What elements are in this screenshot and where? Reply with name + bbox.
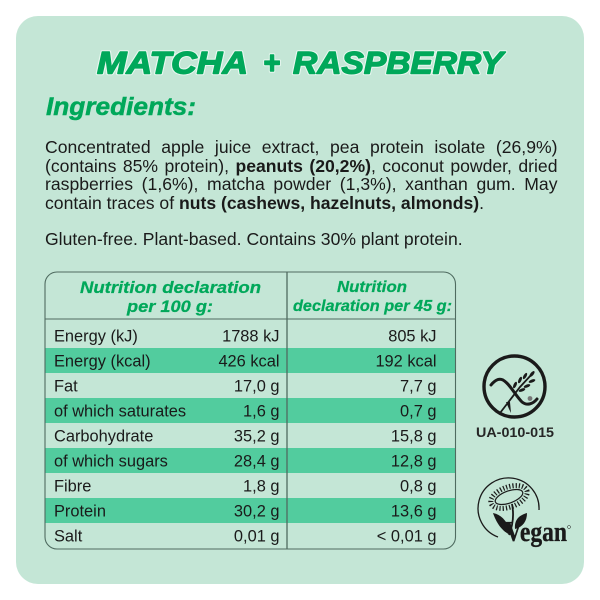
- gluten free code: UA-010-015: [476, 424, 554, 440]
- values per 45 g: 12,8 g: [391, 452, 436, 470]
- values per 100 g: [218, 328, 280, 546]
- values per 100 g: 0,01 g: [234, 528, 280, 546]
- row labels: [54, 328, 186, 546]
- ingredients text: Gluten-free. Plant-based. Contains 30% plant protein.: [45, 229, 463, 249]
- title: RASPBERRY: [293, 44, 506, 80]
- title: +: [263, 44, 280, 80]
- row labels: Energy (kJ): [54, 328, 138, 346]
- values per 45 g: 0,7 g: [400, 402, 436, 420]
- title: MATCHA: [97, 44, 248, 80]
- icon: vegan: [478, 478, 570, 548]
- row labels: Energy (kcal): [54, 352, 151, 370]
- heading: ingredients: Ingredients:: [46, 93, 196, 121]
- vegan wordmark: Vegan: [505, 516, 567, 548]
- icon: gluten free: [476, 356, 554, 440]
- ingredients text: (contains 85% protein), peanuts (20,2%), coconut powder, dried: [45, 156, 558, 176]
- table header: per 45 g: declaration per 45 g:: [293, 298, 452, 315]
- ingredients text: [45, 137, 558, 249]
- values per 45 g: 13,6 g: [391, 502, 436, 520]
- table header: per 100 g: per 100 g:: [126, 297, 213, 316]
- row labels: Fibre: [54, 478, 91, 496]
- row labels: Protein: [54, 502, 106, 520]
- title: MATCHA: [97, 44, 248, 80]
- row labels: of which saturates: [54, 402, 186, 420]
- table bands: [45, 348, 455, 523]
- values per 45 g: [375, 328, 436, 546]
- values per 45 g: 805 kJ: [388, 328, 436, 346]
- values per 100 g: 1,6 g: [243, 402, 280, 420]
- row labels: Fat: [54, 378, 78, 396]
- values per 100 g: 28,4 g: [234, 452, 280, 470]
- row labels: Carbohydrate: [54, 428, 153, 446]
- table header: per 100 g: [80, 278, 261, 316]
- table header: per 100 g: Nutrition declaration: [80, 278, 261, 297]
- ingredients text: Concentrated apple juice extract, pea protein isolate (26,9%): [45, 137, 558, 157]
- values per 45 g: < 0,01 g: [377, 528, 436, 546]
- row labels: of which sugars: [54, 452, 168, 470]
- values per 100 g: 426 kcal: [218, 352, 280, 370]
- values per 100 g: 35,2 g: [234, 428, 280, 446]
- table frame: [45, 272, 456, 549]
- title: RASPBERRY: [293, 44, 506, 80]
- values per 45 g: 0,8 g: [400, 478, 436, 496]
- values per 45 g: 192 kcal: [375, 352, 436, 370]
- ingredients text: contain traces of nuts (cashews, hazelnuts, almonds).: [45, 192, 484, 212]
- values per 100 g: 30,2 g: [234, 502, 280, 520]
- nutrition table: [45, 272, 456, 549]
- title: [97, 44, 506, 80]
- values per 45 g: 15,8 g: [391, 428, 436, 446]
- title: +: [263, 44, 280, 80]
- ingredients text: raspberries (1,6%), matcha powder (1,3%), xanthan gum. May: [45, 174, 558, 194]
- values per 100 g: 1,8 g: [243, 478, 280, 496]
- values per 100 g: 1788 kJ: [222, 328, 280, 346]
- values per 45 g: 7,7 g: [400, 378, 436, 396]
- table header: per 45 g: [293, 279, 452, 315]
- table header: per 45 g: Nutrition: [337, 279, 407, 296]
- values per 100 g: 17,0 g: [234, 378, 280, 396]
- row labels: Salt: [54, 528, 83, 546]
